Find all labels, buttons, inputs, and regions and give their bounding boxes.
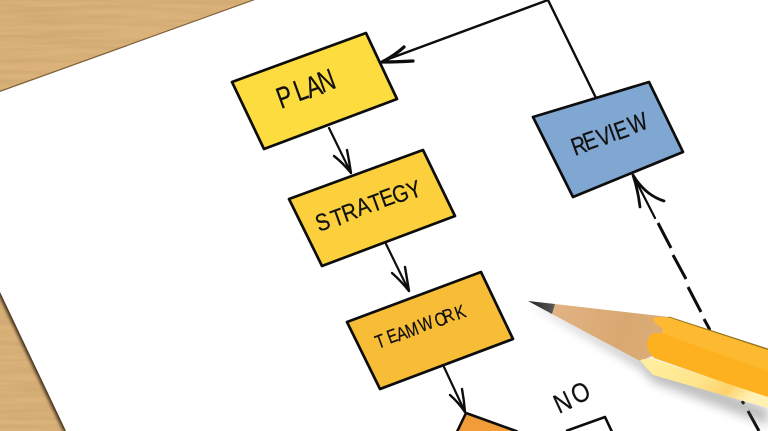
label: review: REVIEW: [567, 107, 652, 161]
paper shadow on top edge: [0, 0, 254, 92]
arrow: plan to strategy: [329, 128, 351, 173]
panel: review box: [533, 82, 683, 197]
label: teamwork: TEAMWORK: [372, 299, 469, 353]
icon: pencil: [528, 301, 768, 408]
pencil middle facet: [647, 333, 768, 398]
label: plan: PLAN: [271, 62, 340, 115]
paper shadow on lower left edge: [0, 281, 78, 431]
label: strategy: STRATEGY: [311, 173, 425, 238]
panel: strategy box: [289, 150, 455, 266]
panel: teamwork box: [347, 272, 513, 389]
pencil shadow: [530, 303, 768, 425]
no-branch box corner: [566, 417, 613, 431]
arrow: review back to plan: [382, 0, 596, 98]
pencil lead tip: [528, 301, 555, 314]
label: no: NO: [549, 376, 596, 420]
panel: plan box: [232, 33, 397, 149]
pencil wood cone: [552, 304, 680, 361]
arrow: dashed return to review: [633, 175, 759, 431]
arrow: teamwork to decision: [444, 367, 465, 412]
pencil upper facet: [653, 317, 768, 374]
pencil dark top edge: [665, 316, 768, 351]
arrow: strategy to teamwork: [386, 244, 409, 291]
pencil highlight facet: [640, 359, 768, 408]
decision diamond: [455, 413, 525, 431]
